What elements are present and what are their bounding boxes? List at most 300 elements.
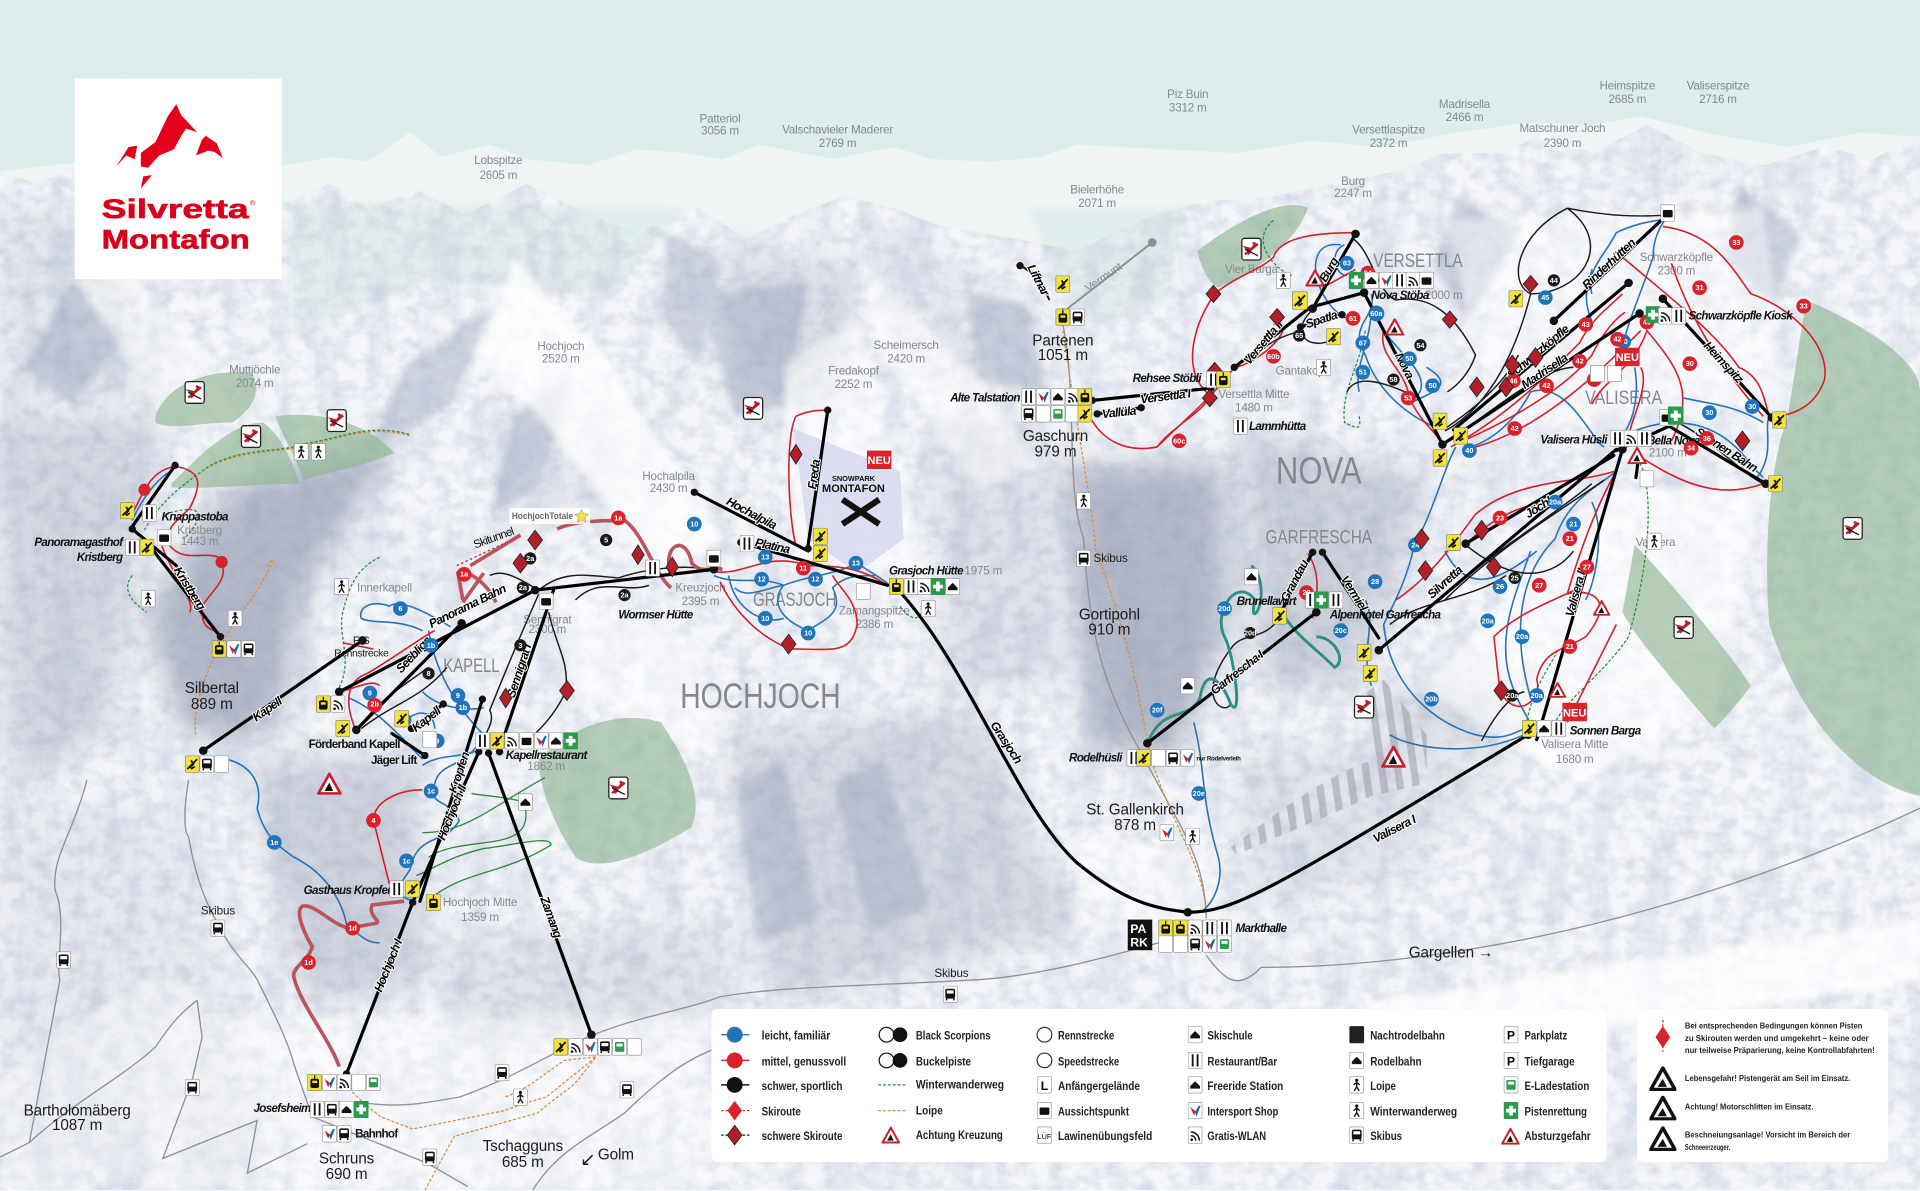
peak labels: Valschavieler Maderer [782, 123, 893, 136]
legend: column 3: Lawinenübungsfeld [1058, 1129, 1152, 1143]
piste numbers blue: 20b [1425, 695, 1438, 704]
peak labels: 1680 m [1556, 753, 1594, 766]
station and hut labels: Markthalle [1236, 922, 1287, 935]
red pistes [132, 227, 1825, 884]
legend: column 5: Nachtrodelbahn [1370, 1029, 1445, 1043]
peak labels: 2071 m [1078, 197, 1116, 210]
legend: column 3: Anfängergelände [1058, 1079, 1140, 1093]
peak labels: Innerkapell [357, 581, 412, 594]
town labels: St. Gallenkirch [1086, 801, 1184, 818]
warning: ski route: zu Skirouten werden und umgekehrt – keine oder [1685, 1033, 1869, 1043]
piste numbers blue: 20a [1531, 691, 1544, 700]
peak labels: Hochjoch [537, 340, 584, 353]
piste numbers red: 36 [1703, 434, 1711, 443]
station and hut labels: Alpenhotel Garfrescha [1329, 608, 1442, 621]
legend: column 4: Intersport Shop [1207, 1105, 1278, 1119]
snowmaking hatch zone [1231, 680, 1427, 855]
lift name labels: Panorama Bahn [427, 581, 508, 631]
station and hut labels: Sonnen Barga [1570, 725, 1642, 738]
peak labels: Kristberg [177, 524, 222, 537]
legend: column 6: Tiefgarage [1524, 1054, 1575, 1068]
legend: column 6: P [1507, 1029, 1515, 1043]
piste numbers blue: 24 [1411, 540, 1421, 549]
piste numbers blue: 10 [804, 629, 812, 638]
peak labels: Fredakopf [828, 365, 880, 378]
lift name labels [171, 236, 1760, 994]
town labels: Golm [598, 1147, 634, 1164]
piste numbers red: 21 [1566, 642, 1574, 651]
logo wordmark: Silvretta [102, 194, 250, 224]
peak labels: Patteriol [699, 112, 740, 125]
peak labels: 2605 m [480, 169, 517, 182]
peak labels: Schwarzköpfle [1640, 251, 1713, 264]
peak labels: 2685 m [1609, 93, 1646, 106]
warning: snowmaking [1651, 1128, 1851, 1152]
piste numbers blue: 51 [1359, 368, 1367, 377]
ski lifts [132, 213, 1772, 1074]
lift name labels: Kapell [250, 694, 285, 724]
station and hut labels [34, 289, 1793, 1141]
area names: HOCHJOCH [680, 676, 841, 716]
piste numbers blue: 20e [1193, 789, 1205, 798]
peak labels: Sennigrat [523, 613, 572, 626]
peak labels: 1862 m [527, 760, 565, 773]
piste numbers red: 2b [370, 700, 379, 709]
piste numbers blue: 40 [1620, 337, 1628, 346]
station and hut labels: Wormser Hütte [618, 608, 694, 621]
skiroute diamonds [500, 276, 1750, 708]
legend panel [711, 1009, 1607, 1162]
park and ride badge: RK [1130, 936, 1148, 950]
legend: column 3: LÜF [1038, 1132, 1052, 1141]
station and hut labels: Jäger Lift [371, 754, 417, 767]
lift name labels: Freda [805, 458, 823, 490]
piste numbers blue: 21 [1569, 520, 1578, 529]
station and hut labels: Brunellawirt [1237, 595, 1298, 608]
park and ride badge [1128, 920, 1152, 950]
background: pale teal upper slopes [288, 202, 1188, 331]
warning triangles [318, 270, 1646, 793]
town labels: 979 m [1035, 444, 1076, 461]
piste numbers blue: 1e [270, 838, 278, 847]
lift name labels: Valisera I [1370, 812, 1419, 846]
piste numbers blue: 12 [758, 575, 766, 584]
piste numbers red: 61 [1349, 314, 1357, 323]
piste numbers black: 8 [427, 669, 431, 678]
piste numbers red: 60c [1173, 436, 1185, 445]
piste numbers black: 2a [519, 583, 528, 592]
area names: NOVA [1276, 451, 1362, 493]
legend: column 3: Aussichtspunkt [1058, 1105, 1129, 1119]
snowpark logo [822, 474, 885, 524]
piste numbers black: 54 [1416, 341, 1425, 350]
legend: special column: Buckelpiste [916, 1054, 971, 1068]
lift name labels: Versettla I [1140, 386, 1192, 406]
peak labels: Matschuner Joch [1520, 122, 1605, 135]
station and hut labels: Kapellrestaurant [506, 749, 588, 762]
peak labels: 2769 m [819, 137, 856, 150]
piste numbers blue: 9 [402, 715, 406, 724]
legend: column 4: Freeride Station [1207, 1079, 1283, 1093]
peak labels: 2466 m [1446, 111, 1483, 124]
piste numbers red: 42 [1576, 357, 1584, 366]
piste numbers blue: 1c [427, 786, 435, 795]
piste numbers red: 21 [1566, 534, 1574, 543]
peak labels: Valiserspitze [1687, 79, 1749, 92]
piste numbers blue: 30 [1748, 402, 1756, 411]
piste numbers red: 11 [799, 564, 807, 573]
piste numbers blue: 6 [398, 604, 402, 613]
peak labels: Madrisella [1439, 98, 1491, 111]
black pistes [355, 208, 1763, 749]
background: ridge facets [24, 184, 1800, 943]
piste numbers black: 25 [1511, 573, 1519, 582]
piste numbers blue [267, 256, 1760, 868]
station and hut labels: Bella Nova [1647, 434, 1701, 447]
station and hut labels: Lammhütta [1249, 420, 1307, 433]
lift name labels: Silvretta [1425, 563, 1466, 601]
lift name labels: Vermiel [1338, 573, 1371, 614]
piste numbers blue: 20a [1516, 632, 1529, 641]
lift name labels: Kapell [409, 703, 444, 735]
peak labels: 2430 m [650, 482, 687, 495]
blue pistes [132, 216, 1769, 943]
piste numbers blue: 60a [1370, 309, 1383, 318]
lift name labels: Hochjoch II [434, 782, 470, 842]
station and hut labels: Valisera Hüsli [1540, 433, 1608, 446]
station and hut labels: Knappastoba [162, 510, 229, 523]
town labels: Gargellen → [1409, 945, 1493, 962]
piste numbers blue: 1c [402, 856, 411, 865]
piste numbers black: 2a [526, 554, 535, 563]
piste numbers red: 43 [1582, 320, 1590, 329]
lift name labels: Seebliga [393, 633, 434, 676]
logo panel [75, 78, 282, 279]
peak labels: 2716 m [1699, 93, 1737, 106]
town labels: Tschagguns [483, 1138, 564, 1155]
piste numbers red: 23 [1496, 513, 1504, 522]
logo mountain [116, 104, 223, 189]
peak labels: Vermunt [1083, 260, 1125, 295]
piste numbers blue: 67 [1359, 338, 1367, 347]
warning: ski route: Bei entsprechenden Bedingungen können Pisten [1685, 1021, 1862, 1031]
legend: column 5: Loipe [1370, 1079, 1396, 1093]
legend: column 4: Gratis-WLAN [1207, 1129, 1266, 1143]
peak labels [177, 79, 1749, 924]
lift name labels: Grasjoch [987, 719, 1025, 766]
town labels: 1051 m [1038, 347, 1088, 364]
town labels: Gortipohl [1079, 607, 1140, 624]
background: distant mountains [0, 116, 1920, 367]
station and hut labels: FIS [353, 635, 370, 647]
station and hut labels: nur Rodelverleih [1196, 755, 1241, 762]
peak labels: Versettlaspitze [1352, 123, 1425, 136]
piste numbers blue: 12 [811, 575, 820, 584]
peak labels: Muttjöchle [229, 363, 280, 376]
lift name labels: Kropfen [446, 750, 472, 795]
piste numbers blue: 50 [1429, 381, 1437, 390]
peak labels: Vier Barga [1225, 263, 1279, 276]
lift name labels: Madrisella [1519, 350, 1571, 392]
snowpark logo: SNOWPARK [832, 474, 876, 483]
lift name labels: Spatla [1304, 308, 1340, 331]
peak labels: 2390 m [1544, 137, 1581, 150]
HochjochTotale tag [509, 508, 590, 524]
snowpark logo: MONTAFON [822, 483, 885, 495]
legend: slopes column: mittel, genussvoll [762, 1054, 846, 1068]
lift name labels: Valisera II [1563, 566, 1589, 618]
HochjochTotale tag: HochjochTotale [512, 511, 573, 521]
peak labels: Hochjoch Mitte [443, 896, 517, 909]
legend: column 6: Pistenrettung [1524, 1105, 1587, 1119]
station and hut labels: Rodelhüsli [1069, 752, 1123, 765]
town labels: Skibus [201, 905, 235, 918]
piste numbers blue: 30 [1705, 408, 1713, 417]
lift name labels: Kristberg [171, 564, 209, 613]
lift name labels: Sennigrat I [504, 641, 535, 699]
piste numbers red: 64 [1364, 269, 1373, 278]
rodelbahn teal piste [1147, 566, 1340, 743]
lift name labels: Nova [1392, 350, 1417, 382]
no-ski icons [185, 238, 1862, 799]
piste numbers blue: 10 [690, 520, 698, 529]
peak labels: 2520 m [542, 352, 580, 365]
legend: slopes column: schwere Skiroute [762, 1129, 843, 1143]
peak labels: 2395 m [682, 595, 719, 608]
piste numbers black: 2a [620, 591, 629, 600]
lift name labels: Heimspitz [1701, 339, 1747, 387]
peak labels: Piz Buin [1167, 88, 1208, 101]
area names: KAPELL [443, 655, 500, 677]
lift name labels: Hochalpila [724, 494, 779, 533]
peak labels: Valisera [1636, 536, 1676, 549]
peak labels: 1480 m [1235, 401, 1273, 414]
piste numbers black [422, 274, 1560, 702]
lift name labels: Schwarzköpfle [1504, 322, 1572, 382]
legend: special column: Achtung Kreuzung [916, 1128, 1003, 1142]
gray lift vermunt [1059, 238, 1157, 317]
piste numbers blue: 20d [1218, 604, 1231, 613]
piste numbers blue: 20c [1335, 626, 1347, 635]
peak labels: Hochalpila [642, 470, 696, 483]
piste numbers black: 58 [1389, 375, 1398, 384]
station and hut labels: Gasthaus Kropfen [304, 884, 394, 897]
station and hut labels: Alte Talstation [949, 392, 1020, 405]
lift name labels: Grandau [1278, 557, 1312, 604]
lift name labels: Garfrescha I [1208, 647, 1267, 698]
piste numbers red: 30 [1686, 359, 1694, 368]
piste numbers black: 44 [1550, 276, 1559, 285]
legend: column 6: E-Ladestation [1524, 1079, 1589, 1093]
piste numbers black: 20d [1244, 629, 1257, 638]
legend: column 6: P [1507, 1054, 1515, 1068]
piste numbers red: 1d [348, 924, 357, 933]
peak labels: 2300 m [529, 623, 566, 636]
legend: column 4: Restaurant/Bar [1207, 1054, 1277, 1068]
town labels: 1087 m [52, 1117, 102, 1134]
legend: column 3: Rennstrecke [1058, 1029, 1114, 1043]
peak labels: Kreuzjoch [675, 581, 725, 594]
legend: special column: Winterwanderweg [916, 1078, 1004, 1092]
piste numbers blue: 26 [1496, 582, 1504, 591]
piste numbers red: 42 [1590, 375, 1598, 384]
valley loipe [195, 331, 1206, 1190]
piste numbers blue: 13 [761, 553, 769, 562]
lift name labels: Jöchle [1522, 490, 1560, 521]
piste numbers red: 42 [1613, 335, 1622, 344]
town labels: Silbertal [185, 680, 239, 697]
warning: snowmobile [1651, 1097, 1813, 1119]
piste numbers red: 33 [1800, 302, 1808, 311]
peak labels: 2074 m [236, 377, 274, 390]
warning: snowmaking: Schneeerzeuger. [1685, 1142, 1730, 1152]
peak labels: Bielerhöhe [1070, 183, 1124, 196]
legend: column 5: Skibus [1370, 1129, 1402, 1143]
piste numbers black: 3 [518, 641, 522, 650]
piste numbers black: 5 [604, 535, 608, 544]
upper hochjoch thick pistes [294, 520, 722, 1067]
peak labels: 3056 m [701, 125, 739, 138]
piste numbers black: 65 [1295, 331, 1303, 340]
piste numbers blue: 63 [1343, 259, 1351, 268]
piste numbers red: 1d [304, 958, 313, 967]
station and hut labels: Skitunnel [472, 525, 515, 551]
piste numbers red: 1a [460, 570, 469, 579]
lift name labels: Hochjoch I [371, 936, 405, 994]
piste numbers red: 1a [614, 513, 623, 522]
lift name labels: Liftnar [1024, 262, 1053, 299]
NEU badges: NEU [868, 455, 891, 467]
warning: ski route: nur teilweise Präparierung, keine Kontrollabfahrten! [1685, 1045, 1875, 1055]
valley roads [0, 324, 1920, 1190]
peak labels: Valisera Mitte [1541, 738, 1608, 751]
piste numbers blue: 9 [456, 691, 460, 700]
legend: column 3: L [1041, 1079, 1049, 1093]
town labels: 878 m [1114, 817, 1156, 834]
lift name labels: Platina [754, 535, 792, 557]
NEU badges: NEU [1616, 352, 1639, 364]
piste numbers blue: 10 [761, 614, 769, 623]
area names: VALISERA [1585, 387, 1663, 409]
town labels: Schruns [319, 1150, 375, 1167]
piste numbers red: 53 [1404, 393, 1412, 402]
piste numbers red: 34 [1687, 444, 1696, 453]
peak labels: 2252 m [835, 378, 872, 391]
station and hut labels: Josefsheim [253, 1102, 311, 1115]
piste numbers black: 20a [1506, 691, 1519, 700]
piste numbers red: 31 [1696, 283, 1704, 292]
piste numbers red: 42 [1511, 424, 1519, 433]
peak labels: 2386 m [855, 618, 893, 631]
station icon clusters [57, 205, 1786, 1165]
park and ride badge: PA [1130, 922, 1146, 936]
peak labels: 2300 m [1657, 264, 1695, 277]
lift name labels: Burg [1316, 254, 1342, 284]
peak labels: Versettla Mitte [1218, 388, 1289, 401]
town labels: Skibus [934, 967, 969, 980]
piste numbers red: 40 [1643, 317, 1651, 326]
peak labels: Heimspitze [1600, 79, 1655, 92]
town labels: Bartholomäberg [24, 1103, 131, 1120]
logo panel: Montafon [102, 225, 250, 255]
skiroute zones: kristberg walking trail [128, 220, 1648, 735]
town labels: Partenen [1032, 332, 1093, 349]
legend: special column [878, 1027, 1004, 1142]
lift ends [129, 209, 1776, 1078]
peak labels: 3312 m [1169, 101, 1207, 114]
lift name labels: Zamang [537, 894, 565, 941]
peak labels: 1359 m [461, 911, 499, 924]
lift name labels: Rinderhütten [1579, 236, 1638, 292]
town labels: 685 m [502, 1154, 544, 1171]
peak labels: 1443 m [181, 535, 218, 548]
legend: special column: Loipe [916, 1103, 943, 1117]
peak labels: Scheimersch [874, 339, 939, 352]
piste numbers red: 60b [1267, 352, 1280, 361]
peak labels: 2420 m [887, 352, 925, 365]
snowpark zone [793, 429, 904, 573]
piste numbers red: 4 [371, 816, 376, 825]
legend: column 3: Speedstrecke [1058, 1054, 1119, 1068]
peak labels: 2247 m [1334, 187, 1372, 200]
piste numbers blue: 45 [1541, 293, 1549, 302]
town labels: 910 m [1088, 621, 1130, 638]
piste numbers blue: 9 [368, 689, 372, 698]
legend: column 5 [1349, 1026, 1457, 1143]
lift name labels: Versettla II [1241, 317, 1286, 367]
peak labels: 2372 m [1370, 137, 1407, 150]
area names: GARFRESCHA [1266, 527, 1373, 549]
station and hut labels: Schwarzköpfle Kiosk [1689, 310, 1793, 323]
warning: ski route [1656, 1020, 1875, 1055]
legend: slopes column: leicht, familiär [762, 1029, 830, 1043]
station and hut labels: Panoramagasthof [34, 536, 124, 549]
town labels: 889 m [191, 696, 233, 713]
peak labels: Lobspitze [474, 154, 522, 167]
area names: GRASJOCH [753, 589, 836, 611]
town labels: Gaschurn [1023, 428, 1088, 445]
piste numbers red: 42 [1542, 381, 1551, 390]
peak labels: Zamangspitze [839, 605, 910, 618]
legend: column 3 [1037, 1027, 1152, 1143]
station and hut labels: Kristberg [77, 551, 123, 564]
area names [443, 250, 1663, 716]
station and hut labels: Rehsee Stöbli [1133, 372, 1202, 385]
background: shaded slopes [0, 208, 1518, 1176]
warning: piste machine rope: Lebensgefahr! Pistengerät am Seil im Einsatz. [1685, 1073, 1850, 1083]
piste numbers blue: 50 [1405, 354, 1413, 363]
peak labels: Burg [1341, 175, 1365, 188]
town labels [24, 332, 1493, 1183]
legend: special column: Black Scorpions [916, 1029, 991, 1043]
warning: snowmobile: Achtung! Motorschlitten im Einsatz. [1685, 1101, 1813, 1111]
peak labels: 2000 m [1425, 289, 1463, 302]
piste numbers red: 29 [1302, 588, 1311, 597]
warning: snowmaking: Beschneiungsanlage! Vorsicht im Bereich der [1685, 1130, 1851, 1140]
lift name labels: Vallüla [1101, 404, 1137, 421]
piste numbers blue: 20a [1549, 497, 1562, 506]
green forest zones [156, 205, 1920, 864]
town labels: ↙ [580, 1149, 595, 1170]
legend: slopes column [721, 1027, 846, 1145]
piste numbers blue: 13 [852, 559, 860, 568]
piste numbers red: 27 [1583, 562, 1591, 571]
piste numbers blue: 40 [1465, 446, 1473, 455]
NEU badges: NEU [1563, 707, 1586, 719]
legend: slopes column: schwer, sportlich [762, 1079, 842, 1093]
station and hut labels: Grasjoch Hütte [889, 564, 964, 577]
town labels: 690 m [326, 1166, 367, 1183]
